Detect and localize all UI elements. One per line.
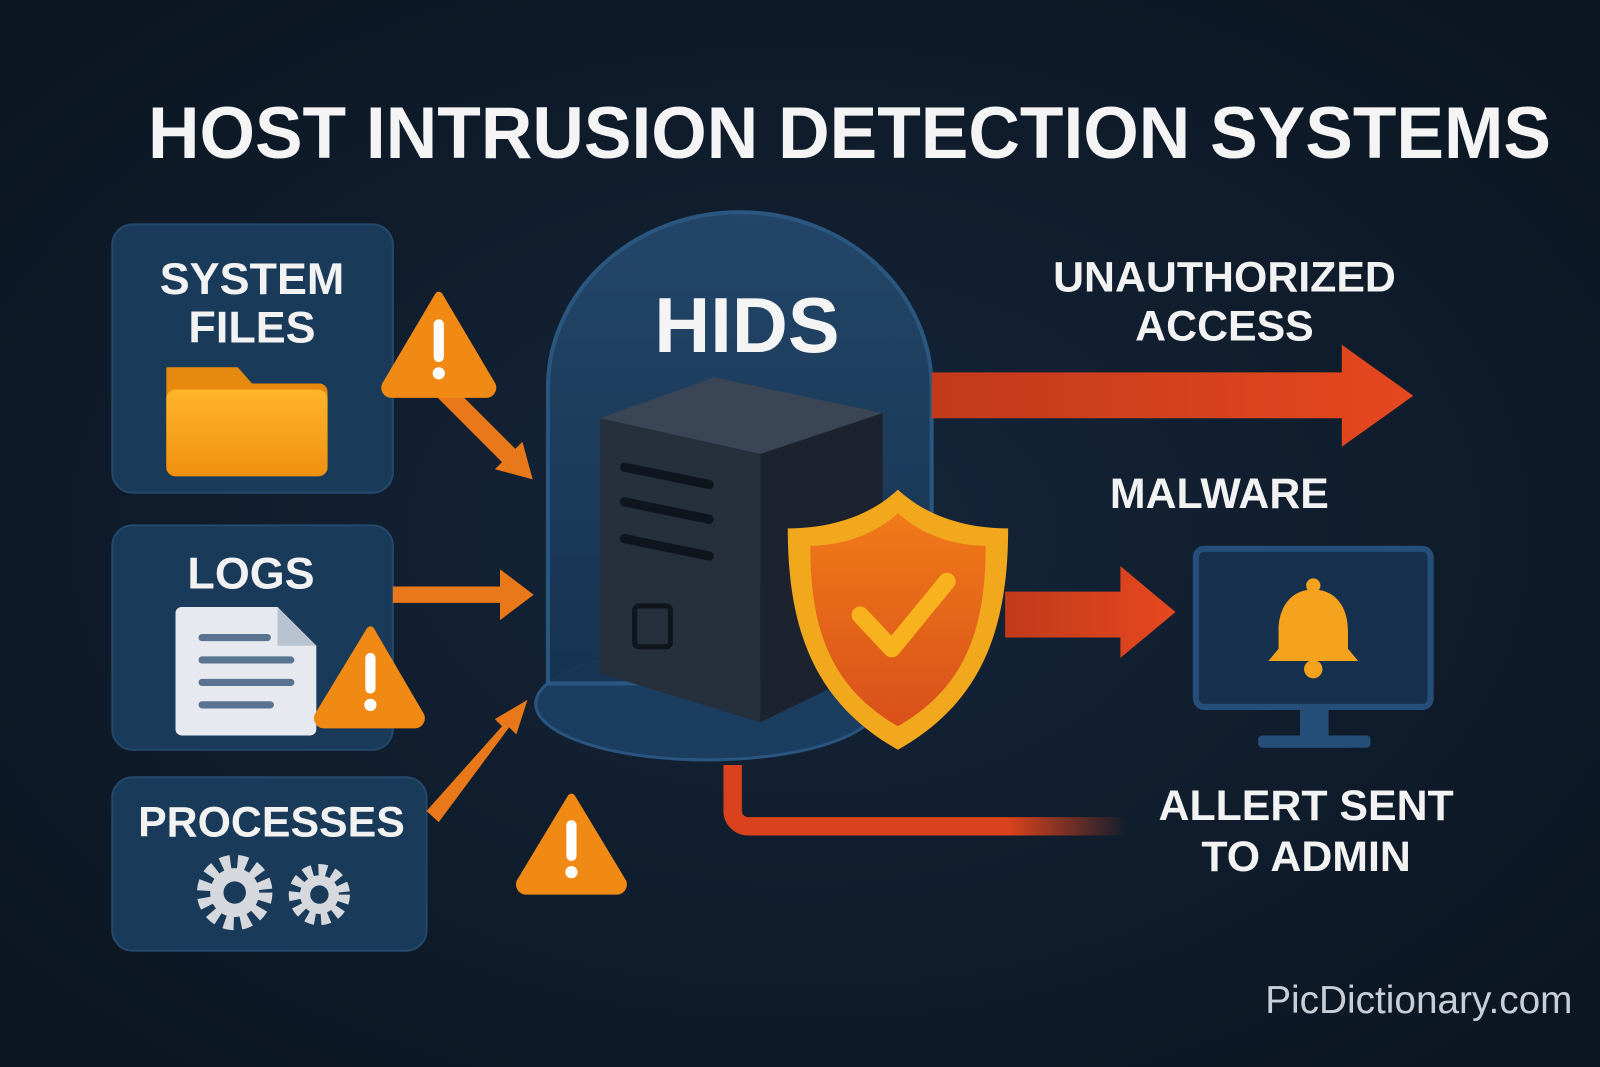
- label: unauthorized access: ACCESS: [1135, 303, 1314, 351]
- icon: server: [600, 377, 883, 722]
- icon: gears: [204, 862, 344, 923]
- icon: document: [176, 607, 316, 735]
- title: HOST INTRUSION DETECTION SYSTEMS: [148, 92, 1551, 174]
- arrow: alert line: [733, 765, 1128, 826]
- icon: shield: [788, 490, 1008, 750]
- label: alert sent to admin: TO ADMIN: [1201, 833, 1411, 881]
- panel: processes: PROCESSES: [138, 798, 405, 846]
- arrow: processes to hids: [427, 700, 528, 822]
- icon: warning 1: [385, 296, 492, 394]
- panel: logs: LOGS: [187, 548, 315, 599]
- hids dome: HIDS: [654, 283, 840, 369]
- label: malware: MALWARE: [1110, 470, 1329, 518]
- arrow: malware: [1005, 566, 1176, 658]
- panel: system files: FILES: [188, 302, 316, 353]
- hids dome: [536, 212, 932, 760]
- panel: logs: [112, 525, 393, 750]
- panel: system files: SYSTEM: [160, 253, 344, 304]
- arrow: files to hids: [436, 383, 533, 479]
- icon: warning 2: [318, 630, 421, 724]
- icon: monitor with bell: [1196, 549, 1431, 748]
- label: unauthorized access: UNAUTHORIZED: [1053, 254, 1396, 302]
- watermark: PicDictionary.com: [1265, 979, 1572, 1022]
- panel: processes: [112, 777, 427, 951]
- icon: folder: [166, 367, 328, 476]
- label: alert sent to admin: ALLERT SENT: [1159, 782, 1454, 830]
- panel: system files: [112, 224, 393, 493]
- icon: warning 3: [520, 798, 623, 891]
- arrow: logs to hids: [393, 569, 534, 620]
- arrow: unauthorized access: [932, 345, 1413, 447]
